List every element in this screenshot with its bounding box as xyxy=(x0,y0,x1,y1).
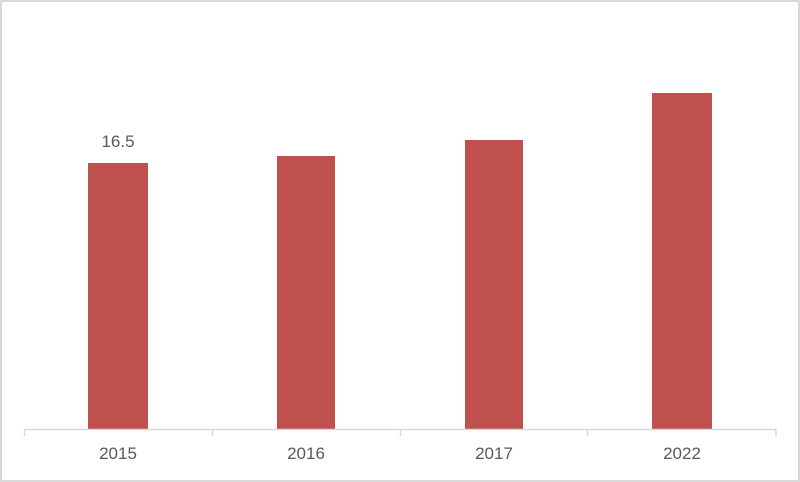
bar chart xyxy=(24,93,776,463)
axis label: 2017: 2017 xyxy=(475,444,513,463)
bar: 2017 xyxy=(465,140,523,429)
axis label: 2015: 2015 xyxy=(99,444,137,463)
x axis xyxy=(24,429,776,436)
value label: 2015: 16.5 xyxy=(101,132,135,151)
axis label: 2016: 2016 xyxy=(287,444,325,463)
axis label: 2022: 2022 xyxy=(663,444,701,463)
bar: 2016 xyxy=(277,156,335,429)
bar: 2015 xyxy=(88,163,148,429)
bar: 2022 xyxy=(652,93,712,429)
